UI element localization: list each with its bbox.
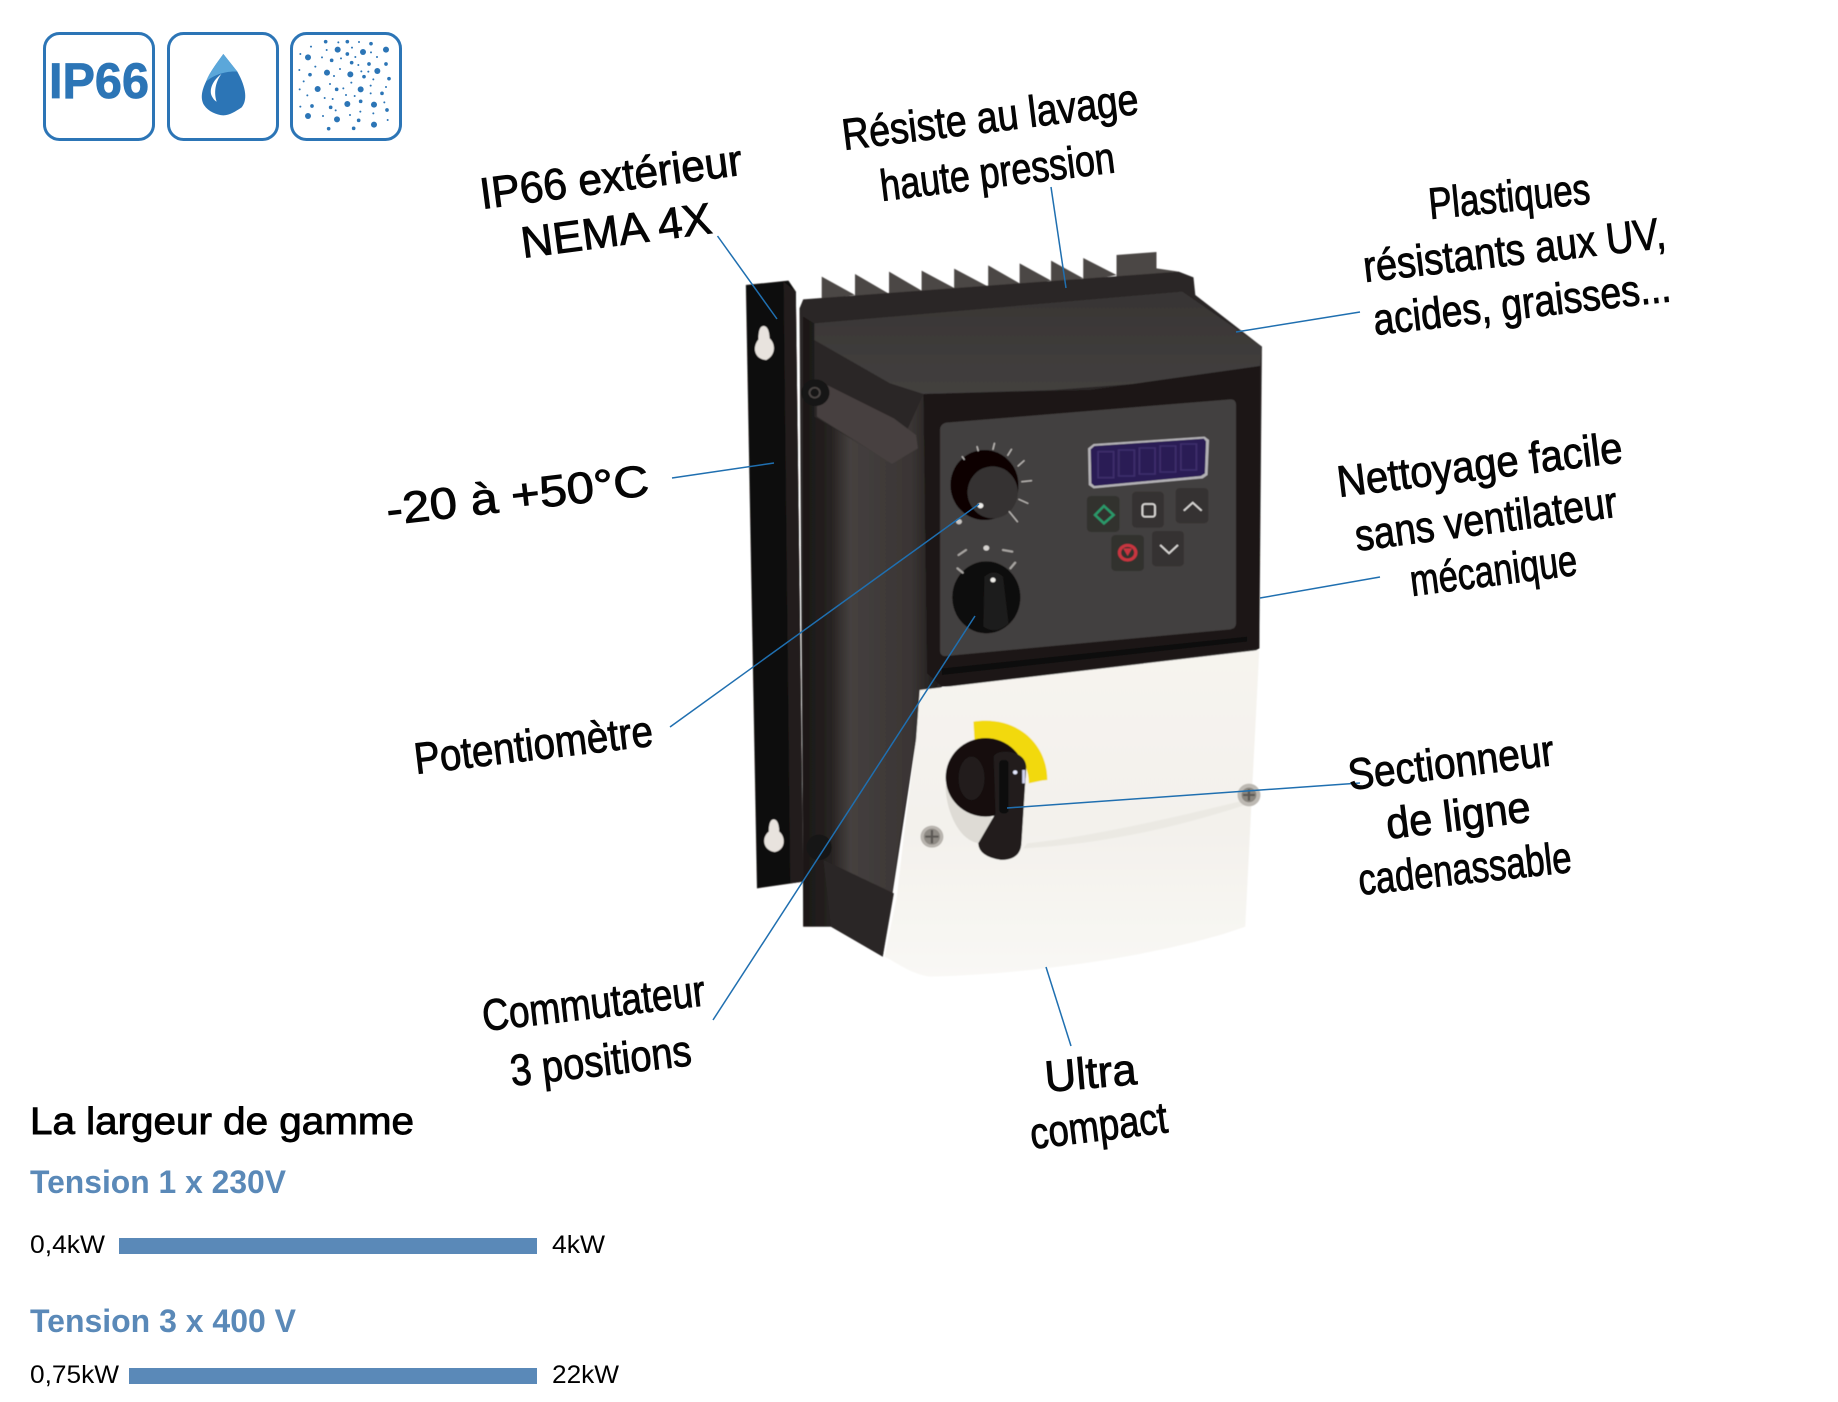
- label: temperature range: -20 à +50°C: [384, 456, 651, 535]
- potentiometer knob: [950, 443, 1031, 524]
- icon: dust particles: [292, 34, 400, 140]
- digital display: [1088, 437, 1209, 488]
- hood: [814, 292, 1262, 394]
- range bar: three phase: [30, 1361, 619, 1389]
- label: UV resistant plastics: résistants aux UV,: [1361, 209, 1668, 292]
- control panel: [940, 399, 1236, 656]
- range bar: three phase: 0,75kW: [30, 1361, 119, 1389]
- label: easy cleaning: mécanique: [1407, 536, 1580, 606]
- label: three position switch: 3 positions: [508, 1026, 694, 1096]
- label: ultra compact: [1027, 1045, 1170, 1159]
- keypad buttons: [1087, 488, 1208, 571]
- enclosure body and top rim: [800, 272, 1262, 957]
- icon: IP66: IP66: [49, 53, 149, 109]
- rotary isolator: [946, 738, 1026, 860]
- label: high pressure washing: [839, 75, 1141, 211]
- leader lines: [670, 187, 1380, 1046]
- range bar: single phase: [30, 1231, 605, 1259]
- label: line disconnector: de ligne: [1383, 783, 1533, 849]
- product photo: variable speed drive: [746, 252, 1262, 977]
- front frame: [923, 366, 1260, 687]
- heatsink fins: [822, 252, 1179, 300]
- label: easy cleaning: sans ventilateur: [1352, 478, 1620, 561]
- label: UV resistant plastics: Plastiques: [1426, 165, 1592, 229]
- label: easy cleaning: Nettoyage facile: [1334, 423, 1625, 507]
- cover screws: [920, 784, 1260, 848]
- yellow padlock arc: [973, 721, 1047, 783]
- label: easy cleaning: [1334, 423, 1625, 606]
- label: three position switch: Commutateur: [480, 967, 708, 1041]
- three position switch: [952, 545, 1020, 633]
- label: line disconnector: [1345, 726, 1574, 905]
- panel: product range: [30, 1101, 619, 1389]
- mounting bracket: [746, 281, 803, 888]
- label: IP66 NEMA 4X: NEMA 4X: [518, 194, 715, 268]
- icon row: [44, 34, 400, 140]
- range bar: single phase: 4kW: [552, 1231, 605, 1259]
- label: line disconnector: Sectionneur: [1345, 726, 1557, 800]
- label: high pressure washing: Résiste au lavage: [839, 75, 1141, 160]
- label: high pressure washing: haute pression: [877, 134, 1117, 211]
- label: IP66 NEMA 4X: IP66 extérieur: [477, 136, 745, 219]
- heading: La largeur de gamme: [30, 1101, 414, 1143]
- label: potentiometer: Potentiomètre: [411, 707, 655, 784]
- left side face: [803, 317, 938, 957]
- label: three position switch: [480, 967, 708, 1096]
- subheading: single phase: Tension 1 x 230V: [30, 1164, 287, 1200]
- label: UV resistant plastics: acides, graisses...: [1371, 262, 1673, 345]
- label: line disconnector: cadenassable: [1356, 833, 1574, 905]
- left hinge arm lower: [824, 860, 894, 957]
- label: IP66 NEMA 4X: [477, 136, 745, 268]
- icon: water drop: [168, 34, 278, 140]
- label: ultra compact: Ultra: [1043, 1045, 1139, 1102]
- left hinge arm upper: [817, 380, 918, 464]
- label: ultra compact: compact: [1027, 1093, 1170, 1159]
- white cover: [885, 650, 1259, 977]
- subheading: three phase: Tension 3 x 400 V: [30, 1303, 297, 1339]
- label: UV resistant plastics: [1361, 165, 1673, 345]
- range bar: single phase: 0,4kW: [30, 1231, 105, 1259]
- icon: IP66: [44, 34, 154, 140]
- range bar: three phase: 22kW: [552, 1361, 619, 1389]
